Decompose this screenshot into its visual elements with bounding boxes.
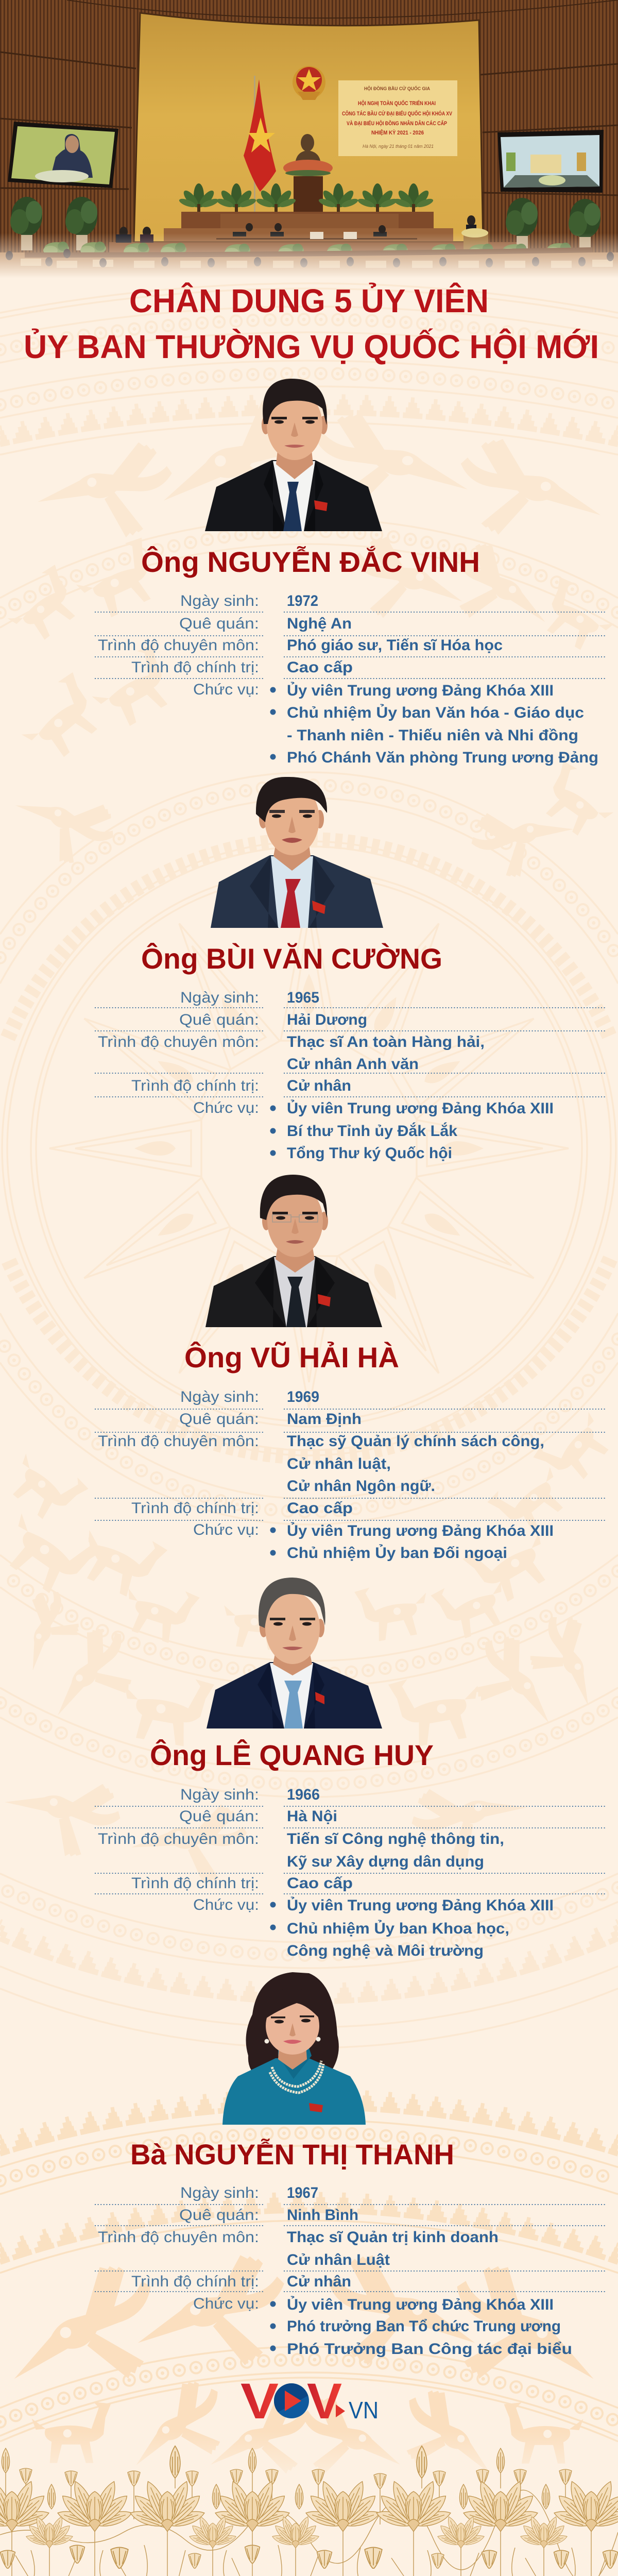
row: professional level: Cử nhân Ngôn ngữ. <box>287 1478 435 1495</box>
row: professional level: Trình độ chuyên môn: <box>98 1033 259 1050</box>
row: positions: Chức vụ: <box>193 1099 259 1116</box>
row: positions: Chủ nhiệm Ủy ban Văn hóa - Giáo dục <box>287 704 584 721</box>
name: Ông NGUYỄN ĐẮC VINH <box>141 546 480 578</box>
row: positions: Ủy viên Trung ương Đảng Khóa XIII <box>287 1522 554 1539</box>
row: political level: Trình độ chính trị: <box>131 1077 259 1094</box>
row: professional level: Trình độ chuyên môn: <box>98 1433 259 1450</box>
flag <box>244 76 276 212</box>
row: positions <box>193 2295 572 2358</box>
row: hometown: Hà Nội <box>287 1808 337 1825</box>
portrait: Nguyễn Thị Thanh <box>222 1972 366 2125</box>
row: professional level: Tiến sĩ Công nghệ thông tin, <box>287 1831 504 1848</box>
portrait: Nguyễn Đắc Vinh <box>205 379 382 531</box>
election banner: NHIỆM KỲ 2021 - 2026 <box>371 129 424 136</box>
logo: VOV.VN: V <box>307 2373 342 2429</box>
name: Ông LÊ QUANG HUY <box>150 1739 434 1771</box>
row: political level: Cao cấp <box>287 1500 353 1517</box>
portrait: Bùi Văn Cường <box>211 777 383 928</box>
row: professional level <box>95 637 605 657</box>
row: birth year: Ngày sinh: <box>180 1786 259 1803</box>
dais <box>109 212 517 252</box>
row: birth year <box>95 592 605 612</box>
panel: Nguyễn Thị Thanh <box>95 1972 605 2358</box>
election banner: VÀ ĐẠI BIỂU HỘI ĐỒNG NHÂN DÂN CÁC CẤP <box>347 120 447 127</box>
logo: VOV.VN: VN <box>349 2397 379 2424</box>
row: professional level: Trình độ chuyên môn: <box>98 1831 259 1848</box>
row: professional level <box>95 1831 605 1873</box>
row: birth year <box>95 989 605 1008</box>
row: birth year: Ngày sinh: <box>180 2184 259 2201</box>
row: political level: Cử nhân <box>287 1077 351 1094</box>
row: positions: Phó Chánh Văn phòng Trung ương Đảng <box>287 749 598 766</box>
row: professional level <box>95 1433 605 1498</box>
yellow wall <box>134 13 483 242</box>
election banner: Hà Nội, ngày 21 tháng 01 năm 2021 <box>363 144 434 149</box>
row: positions <box>193 681 598 766</box>
row: professional level: Kỹ sư Xây dựng dân dụng <box>287 1853 484 1870</box>
row: professional level: Phó giáo sư, Tiến sĩ Hóa học <box>287 637 503 654</box>
row: positions: Chức vụ: <box>193 1896 259 1913</box>
row: birth year: 1972 <box>287 592 318 609</box>
row: positions: Phó Trưởng Ban Công tác đại biểu <box>287 2341 572 2358</box>
row: political level: Trình độ chính trị: <box>131 2273 259 2290</box>
name: Ông BÙI VĂN CƯỜNG <box>141 942 442 975</box>
bust and podium <box>283 134 333 213</box>
row: positions: Công nghệ và Môi trường <box>287 1942 484 1959</box>
row: positions: Ủy viên Trung ương Đảng Khóa XIII <box>287 2296 554 2313</box>
row: political level: Trình độ chính trị: <box>131 1500 259 1517</box>
row: hometown <box>95 1411 605 1432</box>
logo: VOV.VN: V <box>241 2373 279 2429</box>
panel: Bùi Văn Cường <box>95 777 605 1162</box>
election banner: HỘI NGHỊ TOÀN QUỐC TRIỂN KHAI <box>358 99 436 107</box>
row: birth year: Ngày sinh: <box>180 989 259 1006</box>
row: positions <box>193 1099 554 1162</box>
row: professional level <box>95 2229 605 2271</box>
row: political level: Trình độ chính trị: <box>131 659 259 676</box>
hero photo: National Assembly hall <box>0 0 618 278</box>
row: hometown <box>95 1011 605 1031</box>
row: positions: Bí thư Tỉnh ủy Đắk Lắk <box>287 1122 457 1140</box>
title <box>24 282 599 365</box>
portrait: Vũ Hải Hà <box>205 1175 382 1327</box>
row: hometown <box>95 2207 605 2226</box>
row: birth year: Ngày sinh: <box>180 1388 259 1405</box>
row: positions: Chủ nhiệm Ủy ban Đối ngoại <box>287 1544 507 1562</box>
row: professional level: Trình độ chuyên môn: <box>98 2229 259 2246</box>
portrait: Lê Quang Huy <box>207 1578 382 1728</box>
row: political level: Cao cấp <box>287 659 353 676</box>
panel: Lê Quang Huy <box>95 1578 605 1959</box>
row: birth year <box>95 2184 605 2205</box>
national emblem <box>293 66 325 100</box>
row: professional level: Thạc sĩ Quản trị kinh doanh <box>287 2229 499 2246</box>
info table <box>95 2184 605 2358</box>
row: birth year <box>95 1388 605 1409</box>
row: positions: Chức vụ: <box>193 1521 259 1538</box>
row: positions: Phó trưởng Ban Tổ chức Trung ương <box>287 2318 561 2335</box>
delegates and desks <box>0 249 618 278</box>
left screen <box>8 122 118 188</box>
row: positions: - Thanh niên - Thiếu niên và Nhi đồng <box>287 727 578 744</box>
row: hometown: Hải Dương <box>287 1011 367 1028</box>
row: hometown: Quê quán: <box>179 2207 259 2224</box>
row: professional level: Cử nhân Anh văn <box>287 1056 419 1073</box>
row: positions: Ủy viên Trung ương Đảng Khóa XIII <box>287 682 554 699</box>
row: political level <box>95 1500 605 1520</box>
right screen <box>497 130 604 193</box>
plants on dais <box>178 183 434 212</box>
title: ỦY BAN THƯỜNG VỤ QUỐC HỘI MỚI <box>24 328 599 365</box>
row: hometown: Quê quán: <box>179 1011 259 1028</box>
name: Ông VŨ HẢI HÀ <box>184 1341 399 1374</box>
info table <box>95 592 605 766</box>
row: positions: Chức vụ: <box>193 681 259 698</box>
row: political level <box>95 1875 605 1894</box>
row: positions: Ủy viên Trung ương Đảng Khóa XIII <box>287 1896 554 1914</box>
name: Bà NGUYỄN THỊ THANH <box>130 2138 454 2171</box>
logo: VOV.VN <box>241 2373 379 2429</box>
row: positions: Chức vụ: <box>193 2295 259 2312</box>
row: positions: Ủy viên Trung ương Đảng Khóa XIII <box>287 1099 554 1117</box>
row: hometown <box>95 1808 605 1828</box>
row: birth year: Ngày sinh: <box>180 592 259 609</box>
hall plants <box>10 197 600 257</box>
info table <box>95 1388 605 1562</box>
row: professional level: Cử nhân Luật <box>287 2251 390 2268</box>
row: hometown: Quê quán: <box>179 1808 259 1825</box>
row: positions: Chủ nhiệm Ủy ban Khoa học, <box>287 1920 509 1937</box>
row: political level: Trình độ chính trị: <box>131 1875 259 1892</box>
row: birth year: 1966 <box>287 1786 320 1803</box>
row: hometown: Quê quán: <box>179 1411 259 1428</box>
row: positions <box>193 1521 554 1562</box>
row: hometown: Nam Định <box>287 1411 362 1428</box>
row: birth year: 1967 <box>287 2184 318 2201</box>
info table <box>95 1786 605 1959</box>
election banner: HỘI ĐỒNG BẦU CỬ QUỐC GIA <box>364 86 430 91</box>
row: professional level: Cử nhân luật, <box>287 1455 391 1472</box>
info table <box>95 989 605 1162</box>
row: positions <box>193 1896 554 1959</box>
row: political level <box>95 2273 605 2292</box>
panel: Nguyễn Đắc Vinh <box>95 379 605 766</box>
row: professional level: Thạc sỹ Quản lý chính sách công, <box>287 1433 544 1450</box>
logo: VOV.VN: O <box>274 2375 310 2428</box>
row: positions: Tổng Thư ký Quốc hội <box>287 1145 452 1162</box>
row: professional level: Trình độ chuyên môn: <box>98 637 259 654</box>
panel: Vũ Hải Hà <box>95 1175 605 1562</box>
row: hometown: Ninh Bình <box>287 2207 358 2224</box>
row: birth year: 1965 <box>287 989 319 1006</box>
row: professional level: Thạc sĩ An toàn Hàng hải, <box>287 1033 485 1050</box>
row: hometown: Nghệ An <box>287 615 352 632</box>
title: CHÂN DUNG 5 ỦY VIÊN <box>129 282 489 319</box>
row: professional level <box>95 1033 605 1073</box>
row: birth year: 1969 <box>287 1388 319 1405</box>
row: political level: Cử nhân <box>287 2273 351 2290</box>
row: hometown: Quê quán: <box>179 615 259 632</box>
lotus flower border <box>0 2446 618 2576</box>
row: political level: Cao cấp <box>287 1875 353 1892</box>
row: hometown <box>95 615 605 636</box>
election banner: CÔNG TÁC BẦU CỬ ĐẠI BIỂU QUỐC HỘI KHÓA XV <box>342 110 453 117</box>
row: political level <box>95 659 605 679</box>
election banner <box>338 80 457 156</box>
row: political level <box>95 1077 605 1097</box>
row: birth year <box>95 1786 605 1806</box>
